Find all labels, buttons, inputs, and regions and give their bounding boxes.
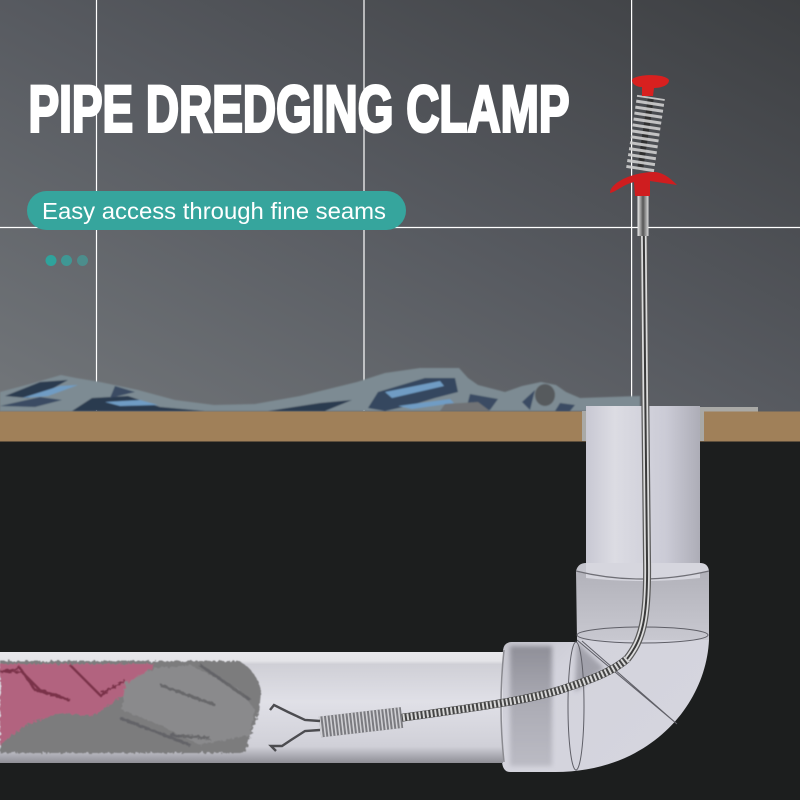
dark lower background (0, 442, 800, 800)
elbow fitting (500, 563, 709, 772)
water splash (0, 368, 640, 411)
subtitle pill (27, 191, 406, 230)
vertical pipe (586, 406, 700, 582)
clamp jaws (270, 705, 320, 751)
subtitle pill: Easy access through fine seams (42, 198, 386, 224)
top spring (640, 97, 651, 170)
title: PIPE DREDGING CLAMP (28, 72, 570, 146)
red finger grip (610, 172, 677, 196)
tile grid lines (0, 0, 800, 411)
clamp spring end (320, 718, 402, 727)
countertop (0, 412, 800, 442)
clamp tool (270, 75, 677, 751)
elbow outline ellipses (568, 627, 708, 770)
pagination dots (46, 255, 88, 266)
elbow sleeve shading (510, 646, 552, 766)
drain opening (582, 407, 758, 441)
towel clog (0, 661, 261, 753)
flexible shaft upper section (627, 200, 647, 659)
red top knob (632, 75, 669, 96)
flexible shaft coiled lower section (400, 659, 627, 718)
horizontal pipe (0, 650, 504, 763)
wall background (0, 0, 800, 412)
rod collar (638, 196, 648, 236)
